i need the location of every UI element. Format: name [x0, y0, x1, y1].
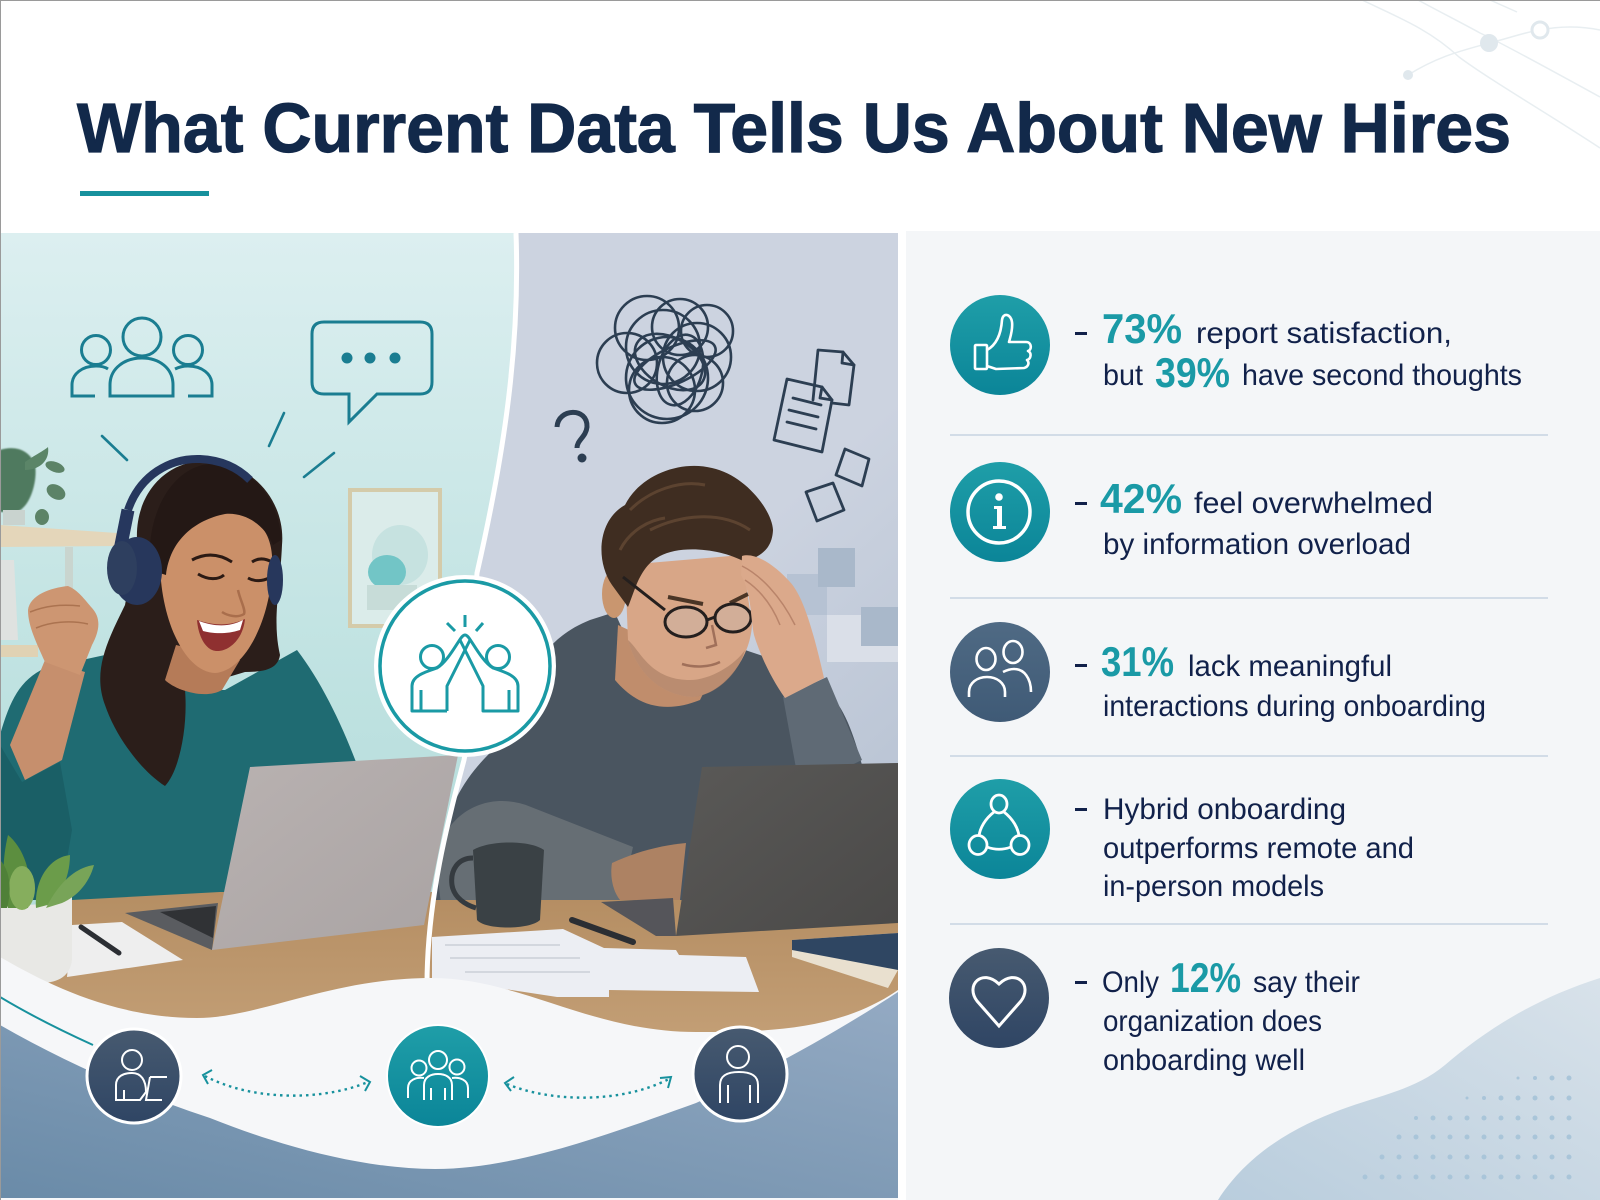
icon: tangled scribble: [597, 296, 733, 423]
swoosh band: [0, 957, 898, 1200]
icon: team of three: [72, 318, 212, 396]
panel: happy new hire scene: [0, 233, 530, 1053]
finding text: [1075, 305, 1522, 396]
icon: two people: [969, 641, 1031, 697]
man's hand: [741, 555, 824, 698]
finding text: 42%: [1100, 475, 1182, 522]
mug: [452, 842, 544, 928]
teal wall: [1, 233, 514, 904]
icon: person at laptop: [116, 1050, 167, 1100]
finding text: interactions during onboarding: [1103, 690, 1486, 723]
woman's face: [160, 512, 272, 673]
woman's hair: [100, 461, 282, 786]
finding text: say their: [1253, 966, 1360, 999]
finding text: [1075, 475, 1433, 561]
man's face: [625, 555, 752, 697]
icon: thumbs up: [975, 315, 1031, 369]
wall shelf and plant: [0, 447, 117, 657]
icon: three people: [408, 1051, 468, 1100]
man's sleeve: [783, 677, 862, 765]
man's brows: [668, 594, 748, 604]
man's laptop: [601, 763, 898, 936]
finding text: have second thoughts: [1242, 359, 1522, 392]
finding text: Only: [1102, 966, 1159, 999]
finding: overwhelm: [950, 462, 1433, 562]
finding: only 12%: [949, 948, 1360, 1077]
finding text: organization does: [1103, 1005, 1322, 1038]
man's glasses: [623, 577, 762, 637]
panel: frustrated new hire scene: [430, 233, 898, 1032]
title accent rule: [80, 191, 209, 196]
picture frame: [348, 488, 442, 628]
finding text: [1075, 638, 1486, 723]
finding text: [1075, 954, 1360, 1077]
icon: information: [968, 481, 1030, 543]
list dividers: [950, 435, 1548, 924]
finding text: 31%: [1101, 638, 1174, 685]
finding text: 12%: [1170, 954, 1241, 1001]
icon: chat bubble: [312, 322, 432, 422]
arrow: remote to team: [203, 1070, 370, 1096]
finding text: [1075, 793, 1414, 903]
woman's laptop: [125, 755, 458, 950]
woman's sweater: [0, 650, 356, 900]
arrow: team to in-person: [505, 1077, 671, 1098]
divider curve: [427, 233, 517, 985]
man's sweater: [432, 612, 862, 905]
teal accent line: [0, 997, 93, 1045]
woman's forearm: [10, 660, 85, 780]
finding text: onboarding well: [1103, 1044, 1305, 1077]
pen: [572, 920, 633, 942]
icon: question mark: [557, 412, 587, 462]
papers: [432, 929, 759, 997]
finding text: report satisfaction,: [1196, 317, 1452, 350]
finding: interactions: [950, 622, 1486, 723]
finding text: 39%: [1155, 349, 1230, 396]
panel: photo illustration: [0, 233, 898, 1200]
finding text: but: [1103, 359, 1144, 392]
man's stubble: [628, 640, 745, 697]
desk right: [430, 900, 898, 1032]
headphones: [107, 459, 283, 605]
potted plant: [0, 835, 94, 983]
woman's hair fringe: [149, 464, 281, 575]
finding text: outperforms remote and: [1103, 832, 1414, 865]
node: in-person worker: [693, 1027, 787, 1121]
panel: key findings: [906, 231, 1600, 1200]
woman's brows and eyes: [192, 555, 272, 581]
man's hand on keyboard: [611, 843, 686, 900]
desk left: [0, 892, 440, 1050]
node: remote worker: [87, 1029, 181, 1123]
icon: high five: [412, 615, 518, 711]
finding: hybrid: [950, 779, 1414, 903]
man's fingers: [742, 566, 795, 625]
woman's smile: [197, 619, 245, 651]
finding text: in-person models: [1103, 870, 1324, 903]
excitement ticks: [102, 413, 334, 477]
woman's sleeve: [0, 745, 72, 900]
wall squares: [787, 548, 898, 662]
icon: single person: [720, 1046, 758, 1103]
woman's neck: [165, 645, 240, 694]
finding text: 73%: [1102, 305, 1182, 352]
finding: satisfaction: [950, 295, 1522, 396]
grey wall: [457, 233, 898, 796]
panel background: [906, 231, 1600, 1200]
icon: heart: [973, 978, 1025, 1026]
man's ear: [602, 575, 625, 618]
man's neck: [615, 625, 702, 707]
finding text: feel overwhelmed: [1194, 487, 1433, 520]
background blob with dots: [1218, 978, 1600, 1200]
icon: connected network: [969, 795, 1029, 854]
finding text: Hybrid onboarding: [1103, 793, 1346, 826]
title: What Current Data Tells Us About New Hires: [77, 89, 1511, 167]
finding text: by information overload: [1103, 528, 1411, 561]
notebook: [792, 933, 898, 988]
woman's fist: [28, 586, 98, 675]
badge: high five: [374, 575, 556, 757]
finding text: lack meaningful: [1188, 650, 1392, 683]
icon: documents: [774, 350, 869, 521]
man's forearm: [436, 801, 633, 905]
blue base wave: [0, 992, 898, 1198]
node: hybrid team: [387, 1025, 489, 1127]
notebook and pen: [67, 922, 183, 977]
man's hair: [601, 466, 773, 607]
header network decoration: [1362, 0, 1600, 148]
woman's nose: [222, 590, 244, 616]
man's nose and mouth: [682, 625, 720, 666]
paper lines: [445, 945, 590, 972]
